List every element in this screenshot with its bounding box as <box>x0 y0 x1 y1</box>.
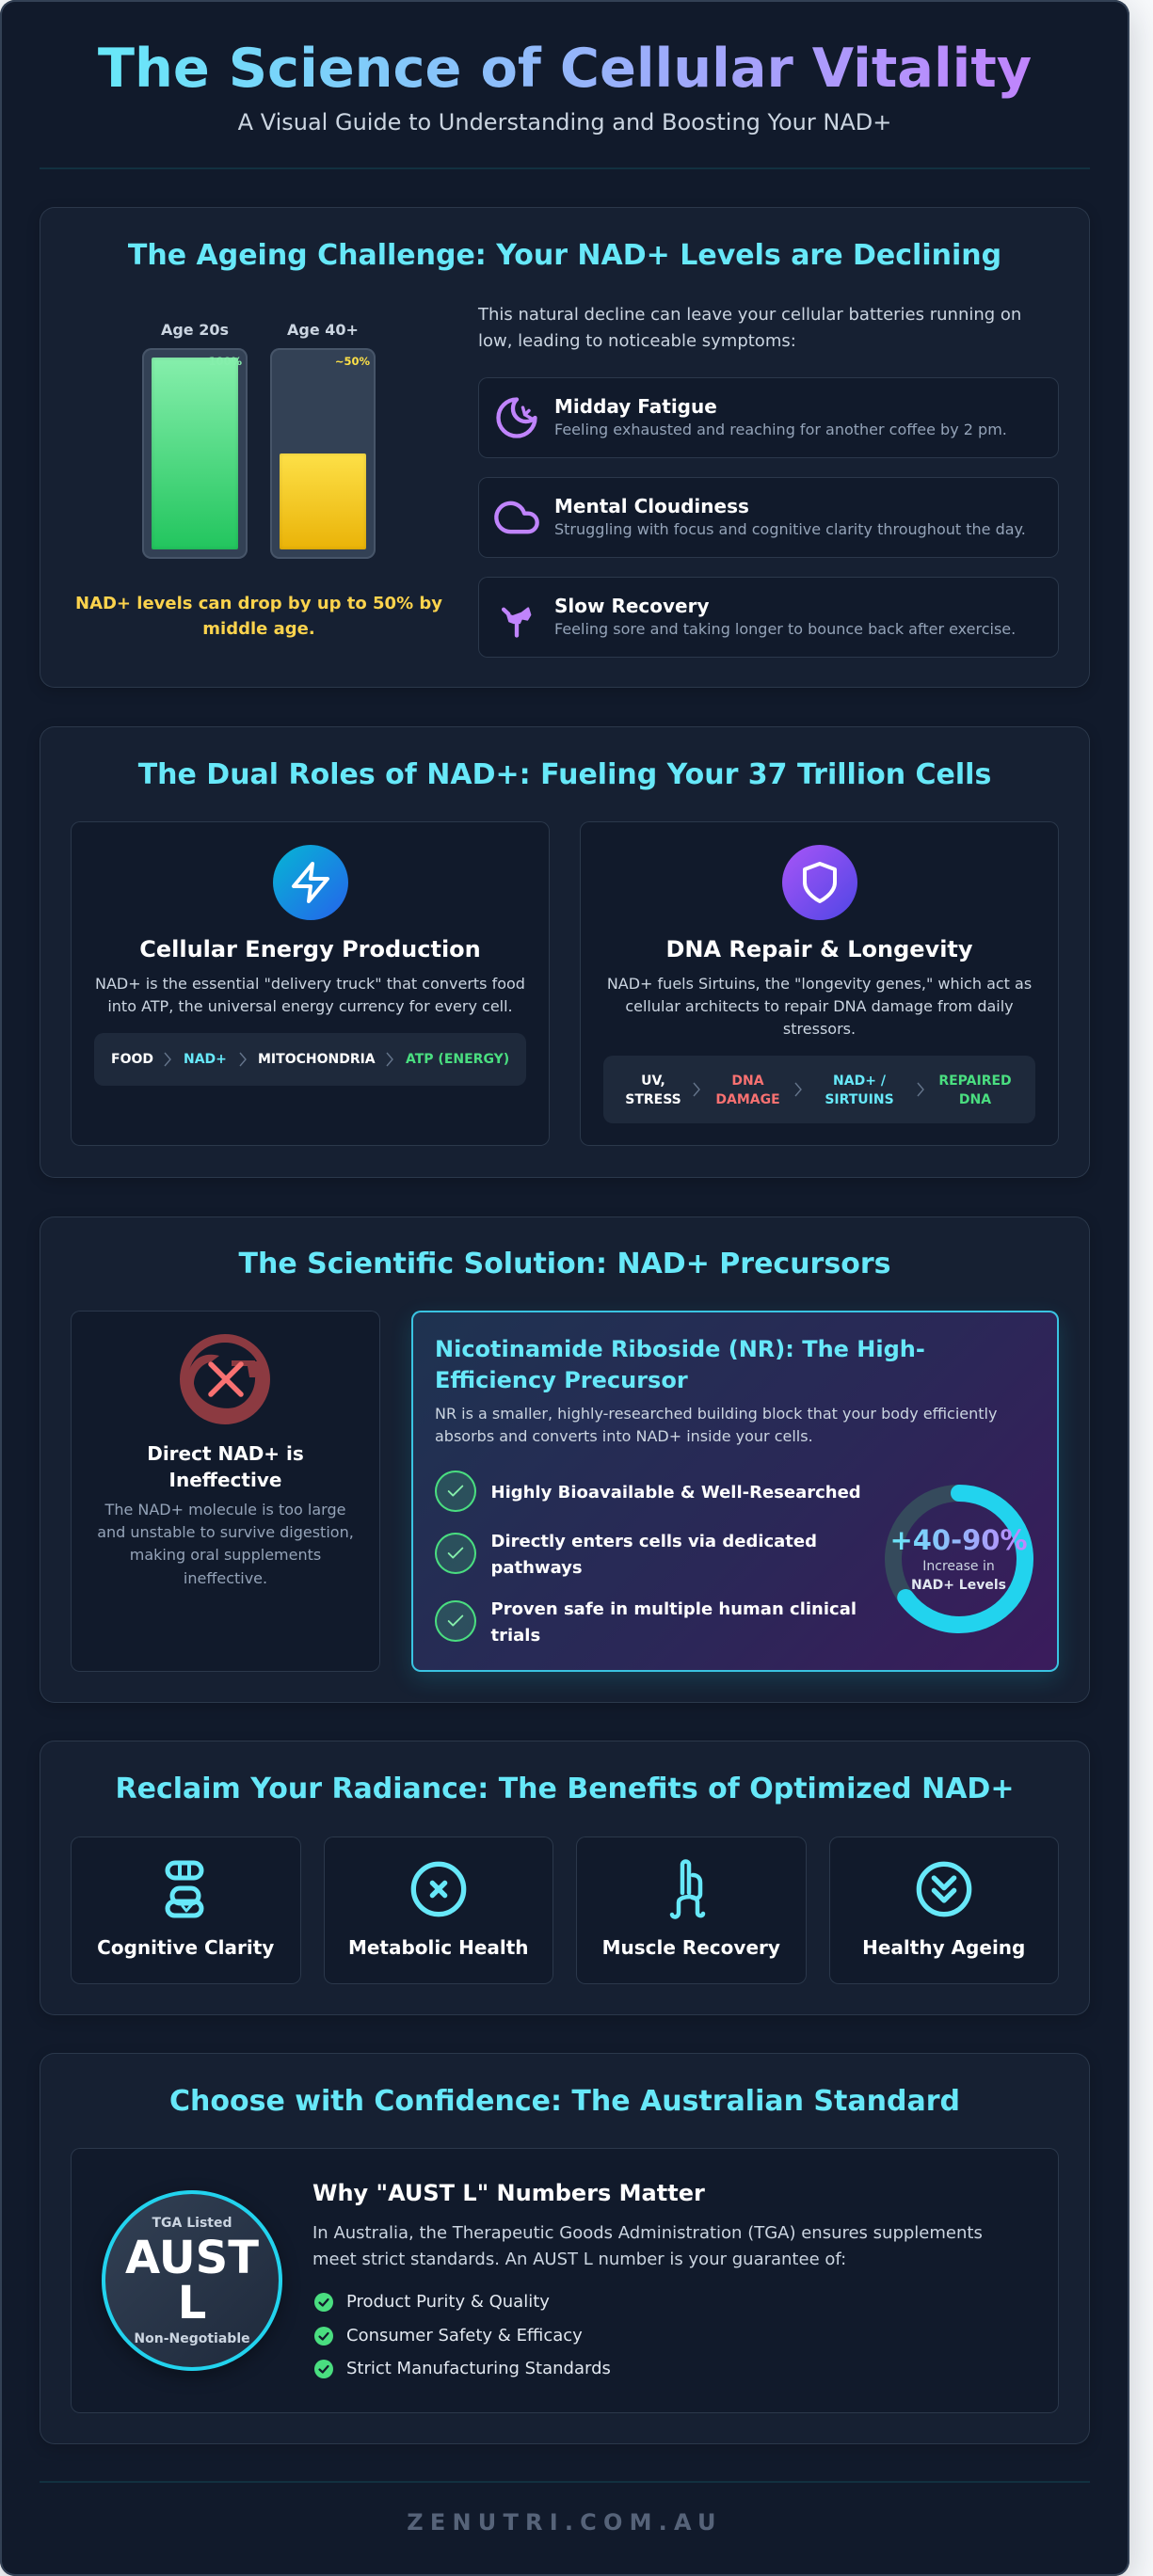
title: The Science of Cellular Vitality <box>98 36 1032 100</box>
arrow <box>164 1052 171 1067</box>
benefit text <box>491 1599 857 1645</box>
symptom description: Feeling sore and taking longer to bounce back after exercise. <box>554 619 1016 638</box>
arrow <box>794 1082 802 1097</box>
benefit item 3 <box>435 1599 857 1645</box>
panel: benefits <box>40 1741 1090 2015</box>
checklist text: Consumer Safety & Efficacy <box>346 2326 583 2345</box>
bar label: age 40+: Age 40+ <box>287 320 359 339</box>
card text: making oral supplements <box>130 1546 321 1564</box>
card text: stressors. <box>783 1020 856 1038</box>
benefit label: Metabolic Health <box>348 1936 529 1959</box>
checklist text: Product Purity & Quality <box>346 2292 550 2312</box>
card text <box>312 2223 983 2269</box>
card heading: Why "AUST L" Numbers Matter <box>312 2180 705 2206</box>
icon: blocked cross <box>180 1334 270 1424</box>
benefit card: cognitive clarity <box>71 1837 301 1984</box>
card: AUST L explanation <box>71 2148 1059 2412</box>
benefit label: Healthy Ageing <box>862 1936 1025 1959</box>
donut value: +40-90% <box>889 1524 1028 1556</box>
icon: circle chevrons <box>917 1861 971 1917</box>
icon: check <box>435 1533 476 1574</box>
card: direct NAD+ ineffective <box>71 1311 380 1672</box>
step: DNA damage <box>715 1073 780 1107</box>
step: DNA damage: DAMAGE <box>715 1092 780 1107</box>
step: UV, stress <box>625 1073 681 1107</box>
bar fill: 100% <box>152 358 238 549</box>
step: repaired DNA <box>938 1073 1012 1107</box>
card text <box>95 975 525 1015</box>
checklist item 1 <box>314 2292 550 2312</box>
symptom title: Mental Cloudiness <box>554 495 749 517</box>
arrow <box>386 1052 393 1067</box>
panel: ageing challenge <box>40 207 1090 688</box>
icon: check badge <box>314 2326 333 2345</box>
card text: ineffective. <box>184 1569 267 1587</box>
badge main text: AUST <box>125 2232 259 2284</box>
card text: NAD+ fuels Sirtuins, the "longevity genes," which act as <box>607 975 1032 993</box>
card text: NAD+ is the essential "delivery truck" that converts food <box>95 975 525 993</box>
step: NAD+ sirtuins: SIRTUINS <box>825 1092 894 1107</box>
card heading: Direct NAD+ is <box>147 1441 304 1464</box>
symptom card: mental cloudiness <box>478 476 1059 557</box>
bar: age 40+ <box>270 348 376 559</box>
benefit card: healthy ageing <box>828 1837 1059 1984</box>
symptom description: Struggling with focus and cognitive clarity throughout the day. <box>554 519 1026 538</box>
step: mitochondria: MITOCHONDRIA <box>258 1052 376 1067</box>
arrow <box>239 1052 247 1067</box>
icon: check <box>435 1471 476 1512</box>
card text <box>97 1501 354 1587</box>
callout: decline caption <box>75 593 442 639</box>
heading: benefits: Reclaim Your Radiance: The Benefits of Optimized NAD+ <box>116 1773 1014 1805</box>
arrow <box>917 1082 924 1097</box>
card text <box>435 1405 997 1445</box>
card: DNA repair and longevity <box>580 821 1059 1146</box>
card heading: Ineffective <box>169 1468 281 1490</box>
arrow <box>693 1082 700 1097</box>
step: DNA damage: DNA <box>731 1073 764 1089</box>
benefit item 2 <box>435 1532 817 1577</box>
symptom title: Slow Recovery <box>554 595 710 617</box>
card text: The NAD+ molecule is too large <box>105 1501 345 1519</box>
icon: sore muscle <box>502 607 531 638</box>
panel: scientific solution <box>40 1216 1090 1703</box>
badge bottom label: Non-Negotiable <box>134 2331 250 2346</box>
step: food: FOOD <box>111 1052 153 1067</box>
benefit item 1 <box>435 1471 861 1512</box>
benefit card: metabolic health <box>324 1837 553 1984</box>
step: repaired DNA: REPAIRED <box>938 1073 1012 1089</box>
card text <box>607 975 1032 1038</box>
card heading: Cellular Energy Production <box>139 936 481 962</box>
card: nicotinamide riboside <box>410 1311 1059 1672</box>
donut ring <box>885 1485 1033 1633</box>
icon: brain links <box>166 1861 203 1917</box>
card heading <box>147 1441 304 1490</box>
heading: ageing challenge: The Ageing Challenge: Your NAD+ Levels are Declining <box>128 239 1001 271</box>
icon: check badge <box>314 2293 333 2312</box>
footer: website: ZENUTRI.COM.AU <box>407 2508 723 2535</box>
bar label: age 20s: Age 20s <box>161 320 229 339</box>
text block: symptoms intro <box>478 305 1021 351</box>
subtitle: A Visual Guide to Understanding and Boosting Your NAD+ <box>238 109 891 135</box>
symptom title: Midday Fatigue <box>554 395 717 418</box>
badge main text: L <box>178 2277 206 2330</box>
benefit text: pathways <box>491 1558 583 1577</box>
icon: check <box>435 1600 476 1642</box>
icon: shield <box>781 845 857 920</box>
step: ATP: ATP (ENERGY) <box>406 1052 509 1067</box>
callout: decline caption: middle age. <box>202 619 315 639</box>
donut caption: NAD+ Levels <box>911 1578 1006 1593</box>
flow diagram: repair pathway <box>603 1056 1035 1123</box>
step: NAD+ sirtuins <box>825 1073 894 1107</box>
icon: check badge <box>314 2360 333 2378</box>
step: repaired DNA: DNA <box>959 1092 991 1107</box>
benefit label: Cognitive Clarity <box>97 1936 274 1959</box>
benefit text <box>491 1532 817 1577</box>
card text: cellular architects to repair DNA damage from daily <box>625 997 1014 1015</box>
card heading: Efficiency Precursor <box>435 1367 688 1393</box>
donut chart: 40-90% increase <box>885 1485 1033 1633</box>
bar value: 100%: 100% <box>208 355 242 368</box>
donut caption: Increase in <box>922 1559 995 1574</box>
heading: australian standard: Choose with Confidence: The Australian Standard <box>169 2085 960 2117</box>
bar: age 20s <box>142 348 248 559</box>
text block: symptoms intro: This natural decline can leave your cellular batteries running on <box>478 305 1021 325</box>
card text: meet strict standards. An AUST L number is your guarantee of: <box>312 2250 846 2269</box>
step: UV, stress: UV, <box>641 1073 665 1089</box>
card text: In Australia, the Therapeutic Goods Administration (TGA) ensures supplements <box>312 2223 983 2243</box>
step: NAD+: NAD+ <box>184 1052 227 1067</box>
donut caption <box>911 1559 1006 1593</box>
card heading: Nicotinamide Riboside (NR): The High- <box>435 1336 925 1362</box>
callout: decline caption: NAD+ levels can drop by up to 50% by <box>75 593 442 613</box>
panel: australian standard <box>40 2053 1090 2444</box>
bar chart: NAD+ levels by age <box>142 320 376 559</box>
benefit text: Directly enters cells via dedicated <box>491 1532 817 1550</box>
card: cellular energy production <box>71 821 550 1146</box>
card heading <box>435 1336 925 1393</box>
card text: into ATP, the universal energy currency for every cell. <box>107 997 513 1015</box>
icon: muscle squiggle <box>670 1859 706 1919</box>
checklist item 2 <box>314 2322 691 2348</box>
text block: symptoms intro: low, leading to noticeable symptoms: <box>478 331 796 351</box>
flow diagram: energy pathway <box>94 1033 526 1086</box>
badge top label: TGA Listed <box>152 2216 232 2231</box>
checklist text: Strict Manufacturing Standards <box>346 2359 611 2378</box>
checklist item 3 <box>314 2356 691 2382</box>
icon: lightning bolt <box>273 845 348 920</box>
symptom card: midday fatigue <box>478 376 1059 457</box>
card text: absorbs and converts into NAD+ inside your cells. <box>435 1427 813 1445</box>
symptom description: Feeling exhausted and reaching for another coffee by 2 pm. <box>554 420 1007 438</box>
heading: dual roles: The Dual Roles of NAD+: Fueling Your 37 Trillion Cells <box>138 758 991 790</box>
icon: circle cross <box>410 1861 467 1917</box>
card heading: DNA Repair & Longevity <box>665 936 973 962</box>
heading: scientific solution: The Scientific Solution: NAD+ Precursors <box>239 1248 890 1280</box>
bar fill: 50% <box>280 453 366 549</box>
card text: NR is a smaller, highly-researched building block that your body efficiently <box>435 1405 997 1423</box>
bar value: 50%: ~50% <box>335 355 370 368</box>
icon: cloud <box>494 501 539 534</box>
benefit text: Proven safe in multiple human clinical <box>491 1599 857 1618</box>
panel: dual roles <box>40 726 1090 1178</box>
badge: AUST L <box>102 2190 282 2371</box>
badge main text <box>125 2232 259 2330</box>
step: NAD+ sirtuins: NAD+ / <box>833 1073 886 1089</box>
benefit card: muscle recovery <box>576 1837 806 1984</box>
icon: moon <box>496 397 537 438</box>
symptom card: slow recovery <box>478 576 1059 657</box>
card text: and unstable to survive digestion, <box>97 1523 354 1541</box>
benefit text: Highly Bioavailable & Well-Researched <box>491 1483 861 1502</box>
benefit text: trials <box>491 1626 540 1645</box>
benefit label: Muscle Recovery <box>602 1936 780 1959</box>
step: UV, stress: STRESS <box>625 1092 681 1107</box>
